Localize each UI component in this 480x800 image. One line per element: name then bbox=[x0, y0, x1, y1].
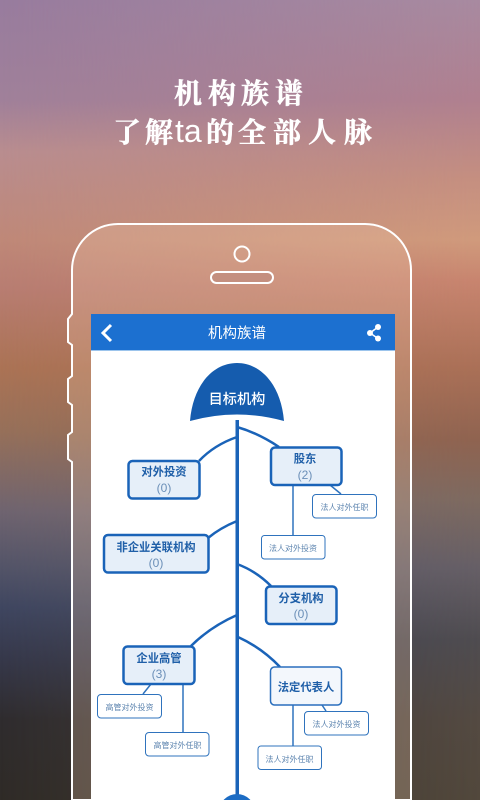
title line 2: 的全部人脉 bbox=[206, 117, 372, 149]
sub-node: 法人对外任职 lower bbox=[258, 746, 322, 770]
trunk bbox=[236, 420, 239, 800]
sub-node: 法人对外投资: 法人对外投资 bbox=[269, 543, 317, 553]
node: 企业高管: 企业高管 bbox=[136, 651, 182, 665]
sub-node: 法人对外投资 bbox=[262, 536, 325, 559]
title line 1: 机构族谱 bbox=[174, 78, 303, 110]
title line 2 bbox=[113, 113, 372, 149]
node: 对外投资: 对外投资 bbox=[141, 464, 187, 478]
phone outline bbox=[68, 224, 411, 800]
title bbox=[113, 78, 372, 149]
node: 非企业关联机构 bbox=[104, 535, 208, 572]
node: 企业高管 bbox=[124, 646, 194, 684]
screen background bbox=[91, 314, 395, 800]
app screen bbox=[91, 314, 395, 800]
sub-node: 高管对外投资 bbox=[98, 694, 162, 718]
node: 企业高管: (3) bbox=[152, 667, 166, 681]
sub-node: 法人对外任职 bbox=[312, 494, 376, 518]
speaker bbox=[211, 272, 273, 283]
sub-node: 高管对外任职: 高管对外任职 bbox=[154, 740, 202, 750]
sub-node: 高管对外投资: 高管对外投资 bbox=[106, 702, 154, 712]
diagram: branches bbox=[191, 427, 280, 667]
header bar bbox=[91, 314, 395, 351]
node: 法定代表人: 法定代表人 bbox=[278, 680, 335, 694]
sub-node: 法人对外任职 lower: 法人对外任职 bbox=[266, 754, 314, 764]
node: 对外投资 bbox=[128, 461, 200, 498]
sub-node: 法人对外任职: 法人对外任职 bbox=[320, 502, 368, 512]
node: 非企业关联机构: 非企业关联机构 bbox=[116, 540, 196, 554]
umbrella: target institution: 目标机构 bbox=[209, 392, 265, 408]
node: 非企业关联机构: (0) bbox=[149, 556, 163, 570]
umbrella: target institution bbox=[190, 363, 284, 421]
phone body bbox=[68, 224, 411, 800]
header title: 机构族谱 bbox=[208, 325, 266, 342]
node: 分支机构: 分支机构 bbox=[278, 591, 324, 605]
icon: back arrow bbox=[103, 325, 111, 341]
camera bbox=[234, 246, 250, 262]
node: 法定代表人 bbox=[270, 667, 342, 705]
title line 2: 了解 bbox=[113, 117, 173, 149]
sub-node: 法人对外投资 lower: 法人对外投资 bbox=[312, 719, 360, 729]
node: 分支机构: (0) bbox=[294, 607, 308, 621]
sub-node: 法人对外投资 lower bbox=[304, 712, 368, 735]
title line 2: ta bbox=[175, 113, 202, 149]
trunk end dot bbox=[219, 794, 255, 800]
diagram: connectors bbox=[143, 485, 341, 746]
node: 对外投资: (0) bbox=[157, 481, 171, 495]
small nodes bbox=[98, 494, 376, 770]
node: 股东: (2) bbox=[298, 468, 312, 482]
icon: share bbox=[367, 324, 381, 342]
sub-node: 高管对外任职 bbox=[146, 732, 209, 756]
node: 股东 bbox=[271, 448, 342, 485]
node: 股东: 股东 bbox=[294, 452, 316, 466]
node: 分支机构 bbox=[266, 586, 336, 624]
